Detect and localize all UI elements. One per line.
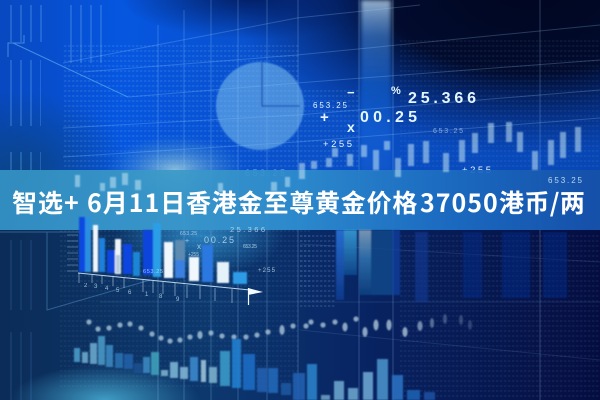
title: 智选+ (12, 184, 80, 220)
title: 6月11日 (87, 184, 186, 220)
title: 港币/两 (499, 184, 585, 220)
floating numbers and math symbols: x (347, 119, 355, 135)
small chart numbers: + (185, 238, 189, 245)
small chart numbers: 653.25 (143, 269, 163, 275)
floating numbers and math symbols: % (391, 85, 401, 97)
chart axis with ticks, labels and arrow: 2 (84, 283, 88, 289)
title band (0, 170, 600, 230)
candlestick chart (75, 122, 581, 192)
small chart numbers (143, 225, 276, 275)
dotted trend line (86, 314, 472, 344)
chart axis with ticks, labels and arrow: 6 (128, 290, 132, 296)
floating numbers and math symbols: + (320, 109, 329, 126)
chart axis with ticks, labels and arrow (67, 235, 263, 305)
title: 香港金至尊黄金价格 (186, 184, 418, 220)
small chart numbers: 653.25 (180, 231, 197, 237)
chart axis with ticks, labels and arrow: 8 (159, 294, 163, 300)
floating numbers and math symbols: +255 (462, 165, 491, 176)
chart axis with ticks, labels and arrow: 4 (105, 286, 109, 292)
pie chart circle (216, 62, 304, 150)
floating numbers and math symbols: 653.25 (433, 128, 463, 135)
chart axis with ticks, labels and arrow: 9 (176, 297, 180, 303)
chart axis with ticks, labels and arrow: 1 (145, 292, 149, 298)
floating numbers and math symbols: 00.25 (360, 109, 417, 126)
background lower (0, 230, 600, 400)
upper bar chart (79, 217, 247, 284)
floating numbers and math symbols (245, 85, 491, 178)
floating numbers and math symbols: 653.25 (313, 101, 348, 110)
floating numbers and math symbols: 653.25 (245, 168, 285, 178)
upper right faded bars (336, 230, 567, 302)
small chart numbers: 00.25 (204, 235, 234, 245)
floating numbers and math symbols: +255 (323, 139, 352, 150)
floating numbers and math symbols: − (347, 85, 355, 100)
floating numbers and math symbols: 25.366 (408, 90, 476, 107)
title: 37050 (420, 184, 499, 220)
small chart numbers: 25.366 (230, 225, 265, 234)
background upper (0, 0, 600, 230)
lower bar chart (74, 336, 435, 400)
small chart numbers: +255 (258, 268, 276, 274)
chart axis with ticks, labels and arrow: 3 (94, 284, 98, 290)
small chart numbers: x (197, 242, 201, 251)
small chart numbers: 653.25 (243, 244, 257, 250)
chart axis with ticks, labels and arrow: 5 (116, 288, 120, 294)
left vertical stripes (3, 5, 110, 400)
small chart numbers: +255 (188, 252, 199, 258)
corner number on band: 653.25 (548, 176, 583, 185)
